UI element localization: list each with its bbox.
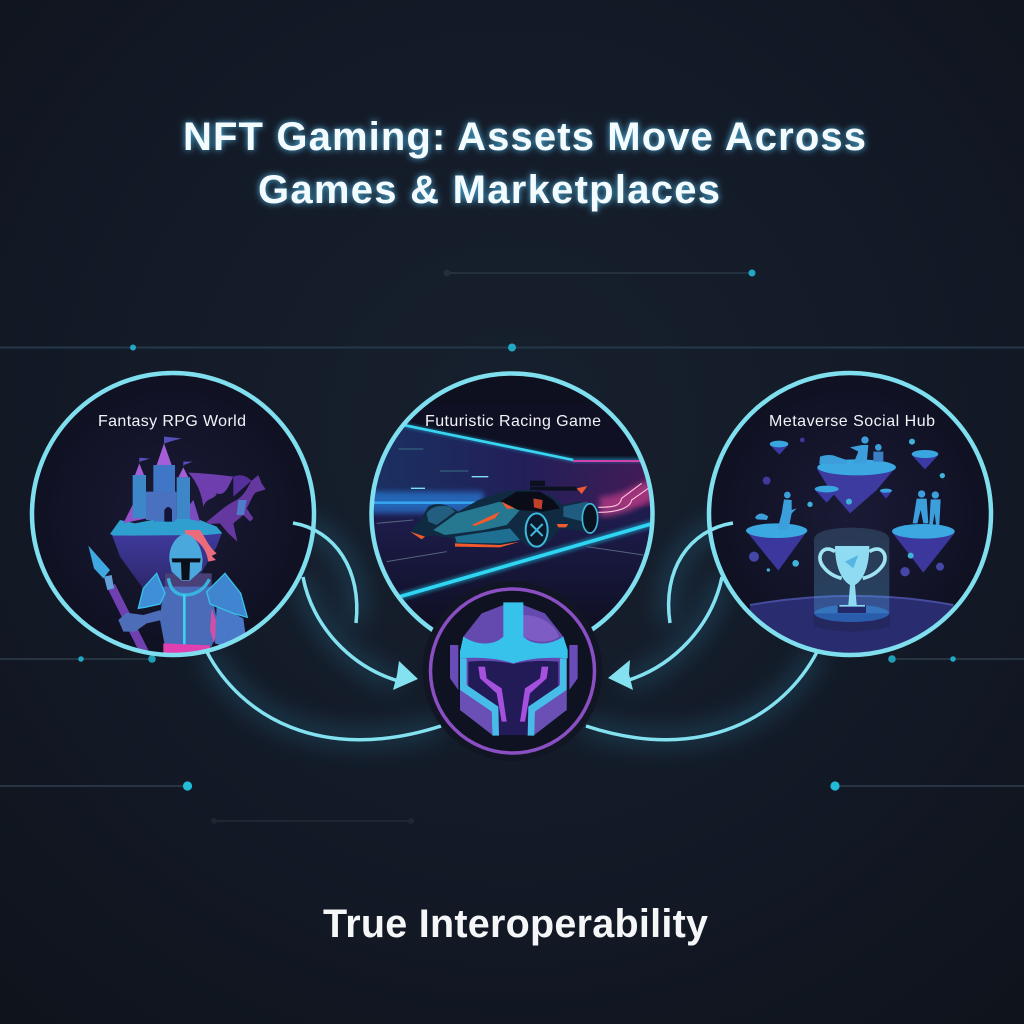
knight	[118, 530, 247, 655]
icon: NFT helmet	[450, 602, 578, 736]
label: Fantasy RPG World	[98, 413, 246, 430]
panel: Futuristic Racing Game	[367, 374, 653, 654]
spear	[88, 546, 148, 650]
title: Games & Marketplaces	[258, 168, 720, 212]
floating island	[110, 517, 222, 593]
left arrows into shared helmet	[207, 523, 441, 740]
ring	[709, 373, 991, 655]
panel: Metaverse Social Hub	[709, 373, 991, 660]
title: NFT Gaming: Assets Move Across	[183, 115, 866, 159]
ring	[372, 374, 652, 654]
racing car	[410, 481, 648, 547]
network lines decoration	[0, 270, 1024, 824]
title: NFT Gaming: Assets Move Across	[183, 115, 866, 159]
avatars	[755, 436, 941, 530]
illustration: castle, dragon and knight	[88, 437, 266, 655]
central helmet badge	[422, 581, 602, 761]
connector glow	[207, 523, 817, 738]
label: Futuristic Racing Game	[425, 413, 601, 430]
ring	[32, 373, 314, 655]
trophy hologram	[813, 528, 890, 632]
title	[183, 115, 866, 212]
neon streaks	[370, 425, 653, 597]
arrowhead left	[393, 661, 418, 690]
track background	[374, 424, 650, 612]
right arrows into shared helmet	[586, 523, 817, 740]
platform	[750, 595, 954, 653]
title: Games & Marketplaces	[258, 168, 720, 212]
illustration: floating islands and trophy	[746, 436, 955, 660]
label: Metaverse Social Hub	[769, 413, 935, 430]
panel: Fantasy RPG World	[32, 373, 314, 655]
illustration: racing car on neon track	[374, 422, 650, 612]
castle	[123, 437, 200, 523]
floating particles	[749, 438, 945, 576]
floating islands	[746, 441, 955, 573]
dragon	[188, 473, 266, 542]
arrowhead right	[608, 660, 633, 690]
footer heading: True Interoperability	[323, 902, 708, 946]
